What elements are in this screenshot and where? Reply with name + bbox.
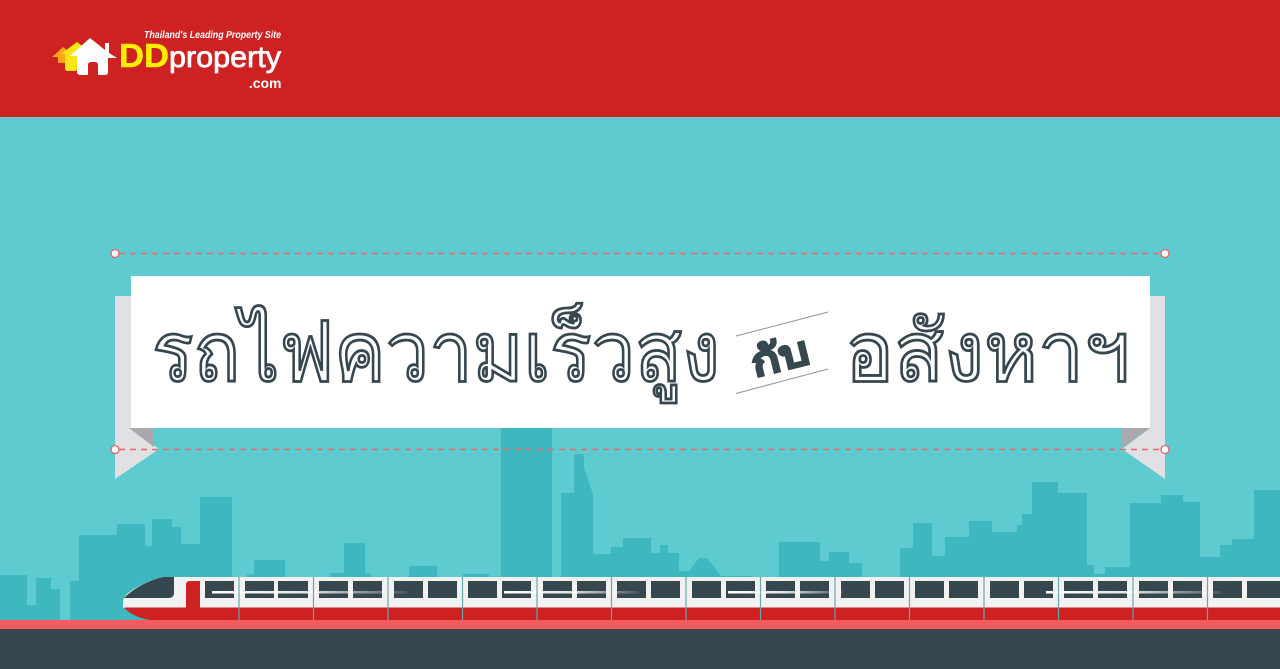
- title: property: อสังหาฯ: [845, 305, 1130, 399]
- train car dividers: [239, 577, 1208, 620]
- top dashed guide line: [111, 250, 1169, 258]
- train cab window: [124, 577, 174, 598]
- icon: yellow house: [61, 42, 88, 71]
- banner left fold: [115, 296, 159, 479]
- rail track: [0, 620, 1280, 629]
- logo tagline: Thailand's Leading Property Site: [144, 29, 281, 41]
- title: high speed rail: รถไฟความเร็วสูง: [152, 303, 720, 403]
- banner: [131, 276, 1150, 428]
- logo wordmark property: property: [169, 41, 281, 74]
- bottom dashed guide line: [111, 446, 1169, 454]
- train red underside: [124, 608, 1280, 620]
- train body: [123, 577, 1280, 608]
- train red stripe: [186, 581, 200, 608]
- train windows: [205, 581, 1280, 598]
- banner right fold shadow: [1122, 428, 1150, 448]
- icon: orange house: [52, 47, 72, 63]
- logo: DDproperty: [52, 29, 282, 91]
- banner right fold: [1122, 296, 1165, 479]
- ground: [0, 629, 1280, 669]
- connector word with rules: กับ: [747, 329, 813, 386]
- header bar: [0, 0, 1280, 117]
- icon: white house: [70, 38, 117, 75]
- logo wordmark DD: DD: [119, 37, 169, 74]
- train window reflections: [212, 591, 1221, 594]
- logo domain: .com: [249, 75, 282, 91]
- connector word with rules: [736, 312, 828, 394]
- banner left fold shadow: [129, 428, 154, 447]
- train: [123, 577, 1280, 620]
- city skyline: [0, 428, 1280, 620]
